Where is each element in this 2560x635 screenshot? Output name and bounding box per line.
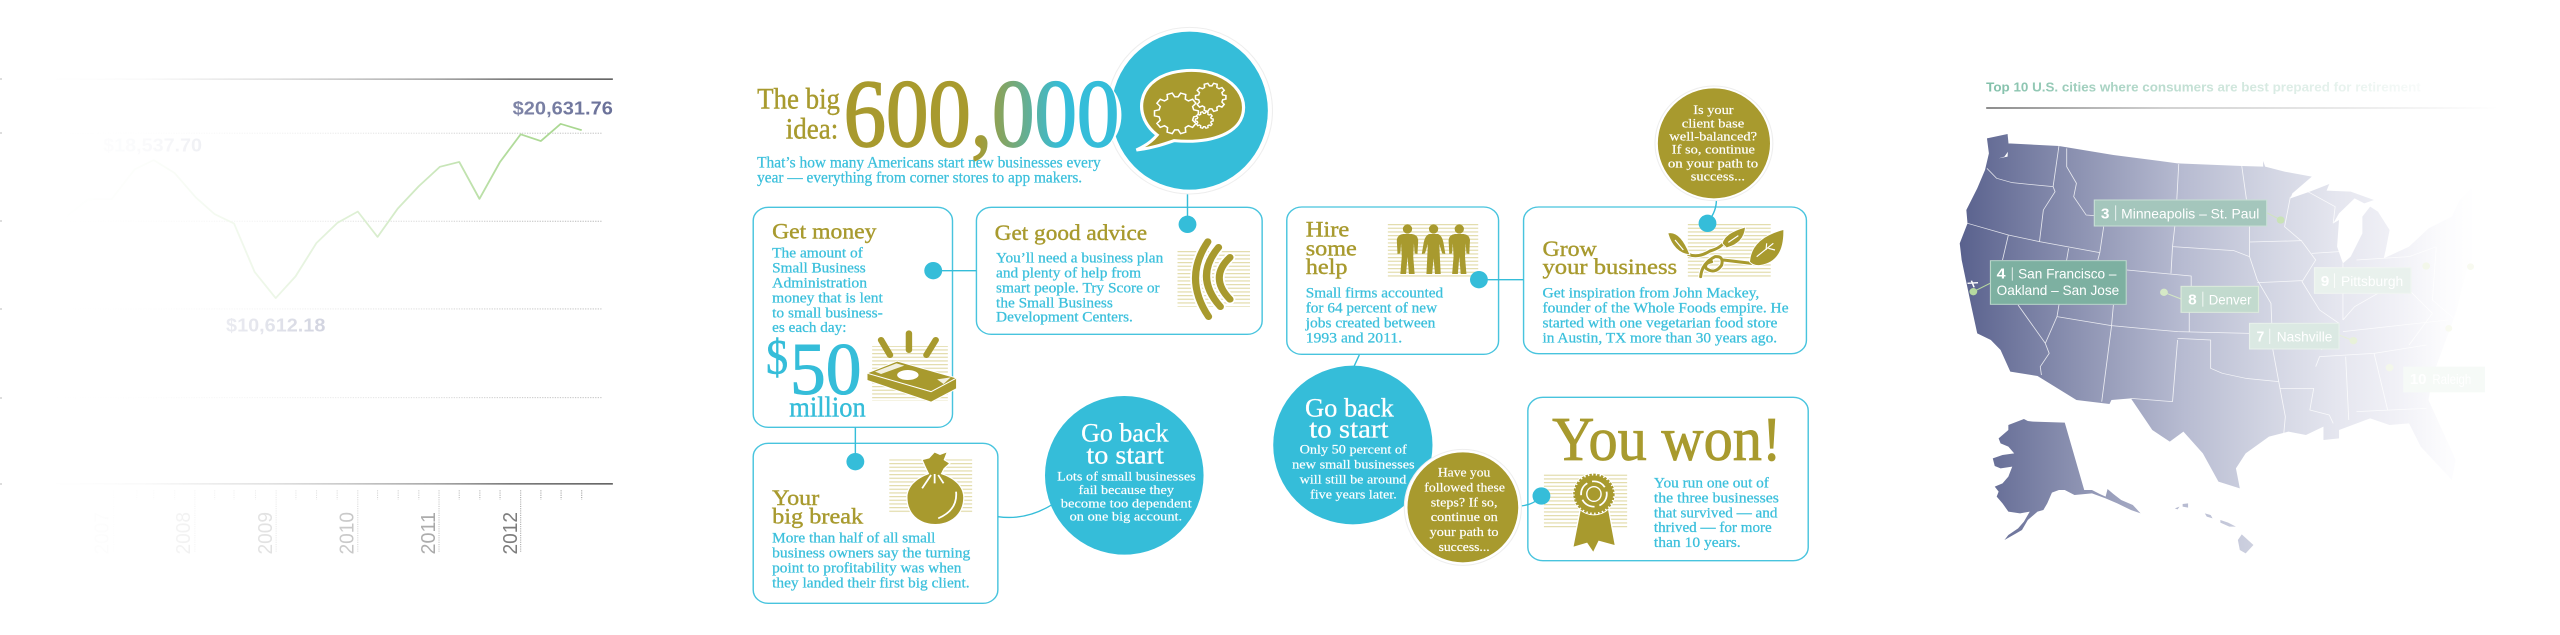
text: client base question xyxy=(1668,103,1758,184)
body: hire some help xyxy=(1305,286,1444,346)
line series xyxy=(175,123,582,299)
city 4: San Francisco: Oakland – San Jose xyxy=(1997,283,2119,299)
heading: get good advice: Get good advice xyxy=(995,221,1147,245)
gear: medium xyxy=(1196,83,1226,111)
stat: $50 million: million xyxy=(789,393,866,423)
city 9: Pittsburgh: 9 xyxy=(2321,274,2329,290)
body: get good advice: You’ll need a business plan xyxy=(996,251,1164,266)
gear: small xyxy=(1195,112,1213,128)
text: followed these steps: success... xyxy=(1439,539,1490,554)
stat: $50 million: $ xyxy=(766,330,788,385)
city 7: Nashville: Nashville xyxy=(2277,330,2332,345)
heading: your big break: Your xyxy=(772,486,820,510)
body: get money: The amount of xyxy=(772,246,863,261)
text: client base question: success... xyxy=(1691,170,1745,184)
circle: client base question xyxy=(1655,86,1773,232)
city 10: Raleigh xyxy=(2432,372,2471,388)
city 8: Denver: Denver xyxy=(2209,292,2251,308)
text: client base question: If so, continue xyxy=(1672,143,1755,157)
circle: followed these steps question xyxy=(1404,449,1550,565)
panel: stock line chart xyxy=(0,79,613,554)
body: hire some help: for 64 percent of new xyxy=(1306,301,1437,317)
label: the big idea xyxy=(757,82,840,145)
connector between hire and grow xyxy=(1479,278,1524,282)
title rule xyxy=(1986,107,2499,109)
stat: $50 million: 50 xyxy=(790,328,861,410)
circle: go back to start 2: to start xyxy=(1309,414,1389,443)
connector to go back circle xyxy=(998,505,1051,517)
body: hire some help: 1993 and 2011. xyxy=(1306,331,1402,346)
icon: sound waves xyxy=(1177,242,1250,317)
state borders xyxy=(1968,146,2456,433)
city 7: Nashville: 7 xyxy=(2257,330,2264,345)
body: hire some help: jobs created between xyxy=(1305,316,1436,332)
connector dot xyxy=(846,453,864,470)
city 3: Minneapolis xyxy=(2094,200,2285,226)
circle: go back to start 2: Go back xyxy=(1305,393,1394,422)
heading: grow your business: your business xyxy=(1542,255,1677,279)
map: Alaska and Hawaii xyxy=(1993,419,2253,553)
text: followed these steps: continue on xyxy=(1431,509,1498,524)
heading: grow your business: Grow xyxy=(1542,237,1597,261)
body: grow your business: in Austin, TX more than 30 years ago. xyxy=(1542,331,1777,346)
city 4: San Francisco xyxy=(1969,261,2126,304)
city 4: San Francisco: 4 xyxy=(1997,266,2006,282)
connectors: idea circle and get money xyxy=(933,187,1187,271)
circle: go back to start 1 xyxy=(1045,396,1204,555)
chart body xyxy=(152,78,613,554)
box: get good advice xyxy=(924,187,1262,334)
heading: your big break: big break xyxy=(772,504,864,528)
body: get good advice: and plenty of help from xyxy=(996,266,1142,281)
body: you won xyxy=(1654,476,1779,551)
box: you won xyxy=(1528,397,1808,561)
body: your big break: More than half of all small xyxy=(772,531,935,547)
circle: go back to start 1: to start xyxy=(1086,439,1164,469)
year labels: 2012 xyxy=(500,512,522,554)
circle: go back to start 1: fail because they xyxy=(1079,482,1174,497)
heading: the big 600,000 with idea bubble xyxy=(757,27,1272,194)
value: high 2007: $18,537.70 xyxy=(103,136,202,156)
year labels: 2008 xyxy=(173,512,195,554)
map title: Top 10 U.S. cities where consumers are best prepared for retirement xyxy=(1986,81,2421,95)
label: the big idea: idea: xyxy=(786,112,838,145)
icon: award ribbon xyxy=(1544,473,1627,552)
body: grow your business: founder of the Whole Foods empire. He xyxy=(1542,301,1789,317)
icon: plant vine xyxy=(1668,228,1783,277)
circle: go back to start 1: Go back xyxy=(1081,418,1169,447)
circle: go back to start 1: become too dependent xyxy=(1061,496,1192,510)
box: grow your business xyxy=(1470,207,1806,354)
year labels: 2011 xyxy=(418,512,440,554)
subhead: year — everything from corner stores to app makers. xyxy=(757,170,1082,186)
body: get money xyxy=(772,246,884,336)
body: get money: Administration xyxy=(772,276,868,292)
circle: go back to start 2: will still be around xyxy=(1300,472,1407,486)
text: client base question: on your path to xyxy=(1668,157,1758,170)
body: get money: es each day: xyxy=(772,320,846,336)
body: get good advice: Development Centers. xyxy=(996,310,1133,326)
panel: map of retirement cities xyxy=(1960,81,2522,553)
text: followed these steps: Have you xyxy=(1438,465,1491,480)
body: your big break xyxy=(772,531,971,592)
text: followed these steps: steps? If so, xyxy=(1431,495,1497,510)
body: you won: thrived — for more xyxy=(1654,520,1772,536)
body: get good advice: smart people. Try Score or xyxy=(996,281,1160,296)
text: client base question: well-balanced? xyxy=(1669,130,1758,144)
heading: hire some help: help xyxy=(1306,255,1347,279)
body: get good advice: the Small Business xyxy=(996,296,1113,311)
axis ticks at left edge xyxy=(0,79,2,484)
label: the big idea: The big xyxy=(757,82,840,115)
year labels: 2010 xyxy=(336,512,358,554)
connector dot xyxy=(1699,215,1716,232)
circle: go back to start 1: Lots of small businesses xyxy=(1057,469,1196,484)
circle: idea bubble xyxy=(1071,27,1272,194)
heading: grow your business xyxy=(1542,237,1677,279)
bay area marker shape xyxy=(1968,281,1978,287)
year labels: 2007 xyxy=(92,512,114,554)
heading: your big break xyxy=(772,486,864,528)
circle: go back to start 2 xyxy=(1273,355,1432,524)
circle: go back to start 2: Only 50 percent of xyxy=(1300,442,1407,457)
connector dot xyxy=(1179,216,1196,233)
year and month ticks xyxy=(114,490,582,552)
gear: large xyxy=(1155,93,1198,134)
connector dot xyxy=(1470,271,1488,288)
body: your big break: business owners say the turning xyxy=(772,546,971,562)
body: you won: than 10 years. xyxy=(1654,535,1741,551)
text: client base question: Is your xyxy=(1693,103,1734,117)
subhead xyxy=(757,155,1101,186)
dot on get money xyxy=(924,262,942,279)
year labels xyxy=(176,512,517,554)
grid lines xyxy=(209,132,602,398)
body: get money: money that is lent xyxy=(772,291,884,306)
city 10 xyxy=(2386,364,2485,392)
icon: speech bubble with gears xyxy=(1136,70,1244,150)
circle: go back to start 2: five years later. xyxy=(1310,487,1397,501)
box: hire some help xyxy=(1287,207,1499,354)
text: followed these steps: followed these xyxy=(1424,480,1505,495)
year labels: 2009 xyxy=(255,512,277,554)
heading: hire some help xyxy=(1306,217,1357,279)
value: low 2009: $10,612.18 xyxy=(226,316,325,336)
body: get money: to small business- xyxy=(772,306,883,321)
body: grow your business xyxy=(1542,286,1789,346)
city 9: Pittsburgh: Pittsburgh xyxy=(2341,274,2403,290)
big number: 600,000 xyxy=(844,60,1119,167)
heading: get money: Get money xyxy=(772,219,877,243)
body: you won: the three businesses xyxy=(1654,491,1779,507)
connector dot xyxy=(1532,487,1550,505)
text: followed these steps xyxy=(1424,465,1505,554)
heading: hire some help: some xyxy=(1306,236,1357,260)
body: get good advice xyxy=(996,251,1164,326)
box: your big break xyxy=(753,396,1204,603)
text: followed these steps: your path to xyxy=(1430,524,1499,539)
text: client base question: client base xyxy=(1682,117,1745,130)
panel: the big idea flow xyxy=(753,27,1808,603)
stat: $50 million xyxy=(766,328,866,423)
city 8: Denver xyxy=(2160,286,2259,312)
body: you won: You run one out of xyxy=(1654,476,1769,492)
city 3: Minneapolis: Minneapolis – St. Paul xyxy=(2121,206,2259,222)
value: latest: $20,631.76 xyxy=(513,99,613,119)
body: hire some help: Small firms accounted xyxy=(1306,286,1444,302)
map: continental United States xyxy=(1960,134,2522,488)
city 8: Denver: 8 xyxy=(2188,292,2197,308)
chart frame lines xyxy=(152,78,613,484)
heading: hire some help: Hire xyxy=(1306,217,1349,241)
heading: you won: You won! xyxy=(1552,405,1781,474)
body: your big break: they landed their first big client. xyxy=(772,576,970,592)
connector from get money xyxy=(853,427,857,462)
icon: three people xyxy=(1388,224,1478,278)
city 3: Minneapolis: 3 xyxy=(2101,206,2110,222)
body: get money: Small Business xyxy=(772,261,866,276)
city 4: San Francisco: San Francisco – xyxy=(2018,266,2117,282)
body: your big break: point to profitability was when xyxy=(772,561,962,577)
icon: money bag xyxy=(889,453,972,524)
city 9: Pittsburgh xyxy=(2315,262,2430,293)
stripes behind plant xyxy=(1688,224,1771,278)
icon: money stack xyxy=(867,333,956,402)
body: grow your business: started with one vegetarian food store xyxy=(1542,316,1778,331)
circle: go back to start 2: new small businesses xyxy=(1292,457,1415,472)
faint city dots in the east xyxy=(2445,263,2474,332)
subhead: That’s how many Americans start new businesses every xyxy=(757,155,1101,171)
box: get money xyxy=(753,207,956,427)
city 7: Nashville xyxy=(2250,323,2357,349)
body: grow your business: Get inspiration from John Mackey, xyxy=(1542,286,1759,302)
city 10: 10 xyxy=(2410,372,2427,388)
circle: go back to start 1: on one big account. xyxy=(1070,509,1182,524)
body: you won: that survived — and xyxy=(1654,506,1778,521)
